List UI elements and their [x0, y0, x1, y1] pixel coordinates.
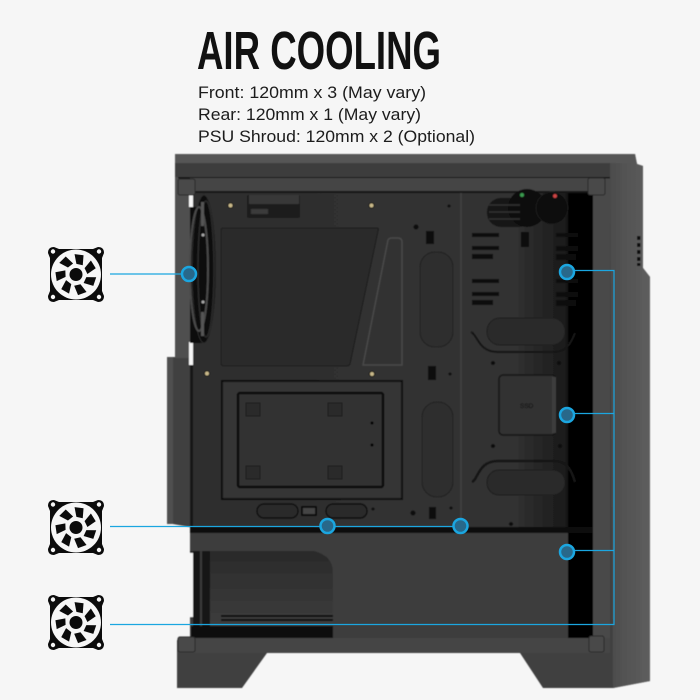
specification text [198, 84, 475, 146]
mounting screws [204, 203, 374, 376]
large motherboard cutout panel [221, 228, 378, 366]
callout connector lines [110, 270, 614, 624]
pc case [167, 154, 650, 688]
rear fan [190, 195, 216, 343]
left frame [175, 154, 190, 358]
left side bracket [167, 357, 197, 527]
specification text: Front: 120mm x 3 (May vary) [198, 84, 426, 102]
icon: rear fan [48, 247, 104, 302]
upper curved emboss [471, 332, 575, 352]
lower cable slots [257, 504, 367, 518]
ssd plate: SSD [520, 403, 534, 410]
vent slits left column [472, 233, 499, 305]
square tie holes [426, 231, 529, 519]
motherboard back plate [193, 193, 593, 530]
hard drive cage [222, 381, 402, 499]
black gap above shroud [190, 527, 593, 533]
top notch [247, 195, 300, 218]
callout markers [182, 265, 574, 559]
grommet oval lower [422, 402, 453, 497]
psu shroud [191, 533, 568, 638]
right inner frame [593, 178, 610, 653]
grommet oval upper [420, 252, 453, 347]
top panel [175, 154, 635, 193]
bottom panel [178, 638, 610, 653]
specification text: Rear: 120mm x 1 (May vary) [198, 106, 421, 124]
lower cable oval [487, 470, 565, 495]
case corner brackets [178, 178, 605, 652]
triangular embossing [363, 238, 402, 365]
specification text: PSU Shroud: 120mm x 2 (Optional) [198, 128, 475, 146]
upper cable oval [487, 318, 565, 345]
psu cutout [190, 551, 333, 638]
title: AIR COOLING [197, 21, 441, 81]
vent slits right column with cables [556, 233, 578, 306]
icon: shroud fan [48, 500, 104, 555]
right black cavity [568, 193, 593, 638]
ssd plate [499, 375, 556, 435]
small holes [372, 204, 562, 526]
lower curved emboss [472, 461, 575, 482]
top rear cables [487, 189, 568, 227]
white gaps at rear [189, 194, 193, 365]
icon: bottom fan [48, 595, 104, 650]
vertical divider [460, 193, 462, 530]
front panel vents [637, 236, 640, 266]
case body silhouette [167, 154, 650, 688]
front panel [610, 154, 650, 688]
